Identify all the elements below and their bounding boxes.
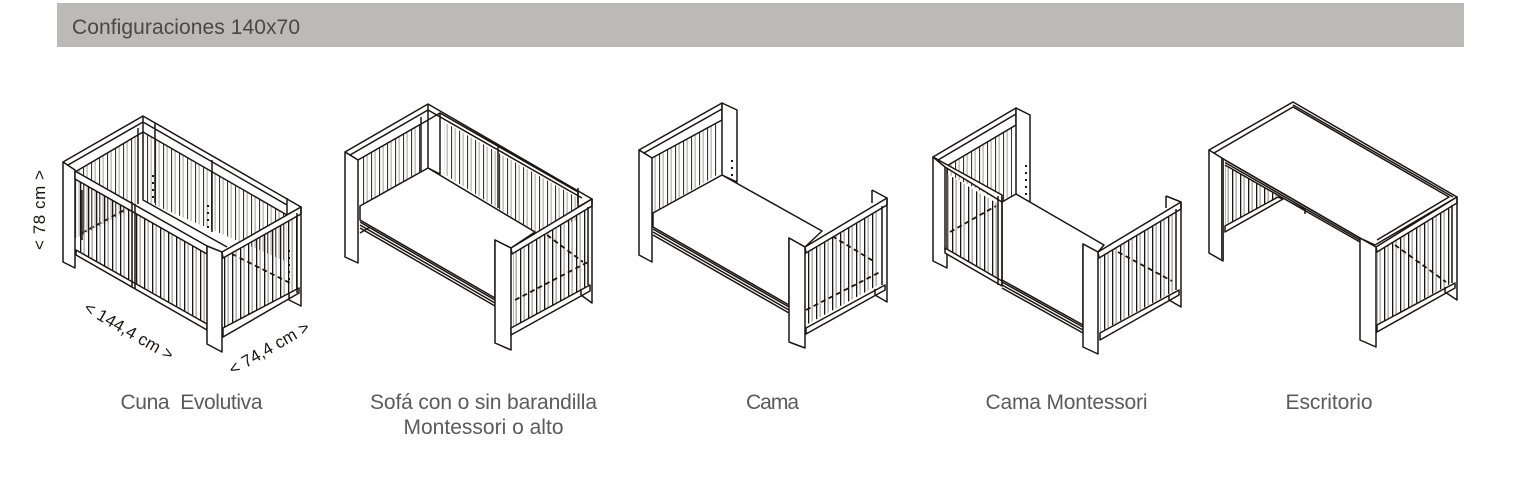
right frame bbox=[1445, 197, 1457, 300]
crib: Cama bbox=[639, 103, 887, 348]
back post bbox=[1016, 108, 1030, 202]
right frame bbox=[875, 198, 887, 302]
left back slats bbox=[940, 121, 1012, 202]
crib: Sofá bbox=[345, 104, 592, 350]
label: Sofá: Montessori o alto bbox=[404, 416, 564, 439]
front post bbox=[1360, 238, 1376, 347]
right slats bbox=[1100, 212, 1176, 332]
right slats bbox=[224, 213, 299, 328]
mattress bbox=[1002, 194, 1104, 325]
right frame bbox=[289, 207, 301, 306]
label: Escritorio: Escritorio bbox=[1286, 391, 1372, 414]
back and side slats bbox=[360, 120, 578, 232]
front post bbox=[495, 240, 511, 350]
label: Cama: Cama bbox=[746, 391, 799, 414]
label: Sofá: Sofá con o sin barandilla bbox=[370, 391, 597, 414]
right frame bbox=[581, 199, 592, 303]
back rails bbox=[63, 116, 301, 215]
crib: Cama Montessori bbox=[933, 108, 1181, 354]
under rail bbox=[653, 229, 789, 313]
back slats bbox=[75, 130, 287, 262]
label: Cuna Evolutiva: Cuna Evolutiva bbox=[120, 391, 263, 414]
back post bbox=[722, 103, 737, 182]
left post bbox=[1209, 150, 1223, 261]
front montessori panel bbox=[947, 174, 1000, 284]
left post bbox=[345, 152, 358, 263]
mattress bbox=[360, 168, 535, 298]
front post bbox=[1083, 244, 1098, 354]
right rail stub bbox=[872, 190, 887, 203]
under rail bbox=[360, 222, 495, 306]
right slats bbox=[1377, 208, 1450, 325]
dimension: height: < 78 cm > bbox=[30, 170, 49, 250]
right frame bbox=[1166, 196, 1181, 307]
right rail bbox=[1098, 202, 1181, 258]
back rail bbox=[639, 103, 722, 158]
header bar bbox=[57, 3, 1464, 47]
back rails bbox=[345, 104, 592, 207]
desk front edge bbox=[1225, 160, 1360, 242]
front post bbox=[789, 238, 805, 348]
desktop bbox=[1209, 102, 1457, 245]
label: Cama Montessori: Cama Montessori bbox=[986, 391, 1148, 414]
heading: Configuraciones 140x70 bbox=[72, 16, 300, 39]
left post bbox=[639, 150, 652, 262]
dimension: width: < 74,4 cm > bbox=[226, 317, 313, 379]
back rail bbox=[933, 108, 1016, 167]
mattress bbox=[653, 175, 822, 305]
right slats bbox=[513, 208, 590, 329]
crib: Cuna Evolutiva bbox=[63, 116, 301, 352]
left post bbox=[63, 162, 75, 268]
right rail bbox=[805, 198, 887, 253]
dimension: length: < 144,4 cm > bbox=[81, 298, 177, 364]
under rail bbox=[1002, 282, 1083, 333]
left post bbox=[933, 157, 947, 268]
label: Sofá bbox=[370, 391, 597, 439]
left slats bbox=[1225, 165, 1281, 225]
right slats bbox=[806, 206, 880, 325]
front rail bbox=[75, 171, 207, 254]
right rail bbox=[511, 199, 592, 254]
right rail bbox=[1376, 197, 1457, 252]
front slats bbox=[77, 178, 207, 324]
desk: Escritorio bbox=[1209, 102, 1457, 347]
left slats bbox=[653, 118, 717, 213]
right rail bbox=[222, 207, 301, 258]
front right post bbox=[207, 246, 222, 352]
